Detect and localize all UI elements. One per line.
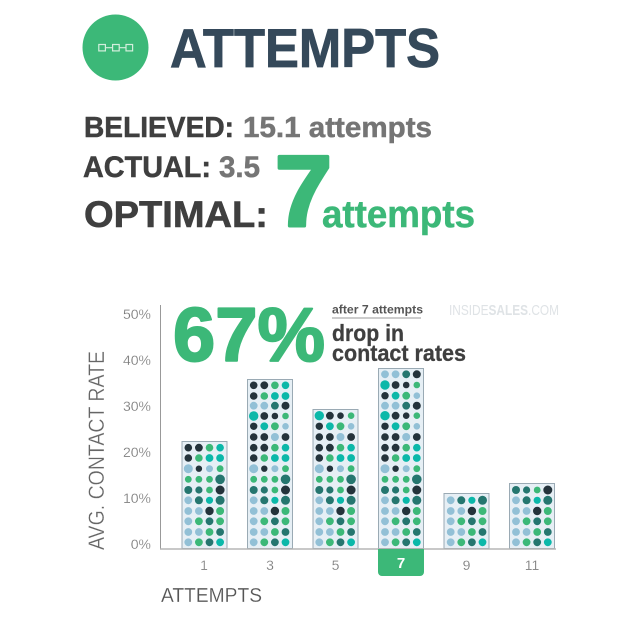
x axis highlight tab: 7: 7 [397, 555, 405, 572]
stat: believed attempts: BELIEVED: [84, 112, 234, 144]
callout: 67% drop [173, 293, 466, 378]
bar: 9 attempts [444, 494, 489, 548]
stat: optimal attempts [84, 136, 475, 248]
y axis labels: 50% [123, 306, 151, 322]
x axis labels [200, 557, 539, 573]
bar: 7 attempts (highlighted) [378, 368, 424, 548]
callout: 67% drop: 67% [173, 293, 325, 378]
y axis labels: 10% [123, 490, 151, 506]
x axis labels: 5 [332, 557, 340, 573]
y axis labels: 30% [123, 398, 151, 414]
stat: believed attempts: 15.1 attempts [243, 112, 432, 144]
x axis labels: 9 [463, 557, 471, 573]
bar: 1 attempt [182, 442, 227, 548]
x axis title: ATTEMPTS [161, 585, 262, 607]
y axis labels: 0% [131, 536, 151, 552]
y axis labels [123, 306, 151, 552]
y axis labels: 40% [123, 352, 151, 368]
x axis highlight tab: 7 [378, 549, 424, 576]
callout: 67% drop: after 7 attempts [332, 302, 423, 316]
stat: believed attempts [84, 112, 432, 144]
title: ATTEMPTS [170, 17, 440, 79]
stat: actual attempts: 3.5 [219, 151, 260, 184]
y axis labels: 20% [123, 444, 151, 460]
y axis title: AVG. CONTACT RATE [84, 351, 109, 550]
stat: optimal attempts: 7 [275, 136, 332, 248]
stat: optimal attempts: attempts [322, 194, 475, 236]
x axis labels: 1 [200, 557, 208, 573]
x axis labels: 3 [266, 557, 274, 573]
logo wordmark: INSIDESALES.COM [449, 302, 559, 319]
bar: 3 attempts [248, 380, 292, 548]
callout: 67% drop: drop in [332, 320, 404, 346]
bar: 11 attempts [510, 484, 554, 548]
callout: 67% drop: contact rates [332, 340, 466, 366]
stat: optimal attempts: OPTIMAL: [84, 194, 268, 235]
bar: 5 attempts [313, 410, 358, 548]
x axis labels: 11 [525, 557, 539, 573]
icon: chain of attempts badge [82, 14, 148, 80]
stat: actual attempts: ACTUAL: [83, 151, 211, 184]
